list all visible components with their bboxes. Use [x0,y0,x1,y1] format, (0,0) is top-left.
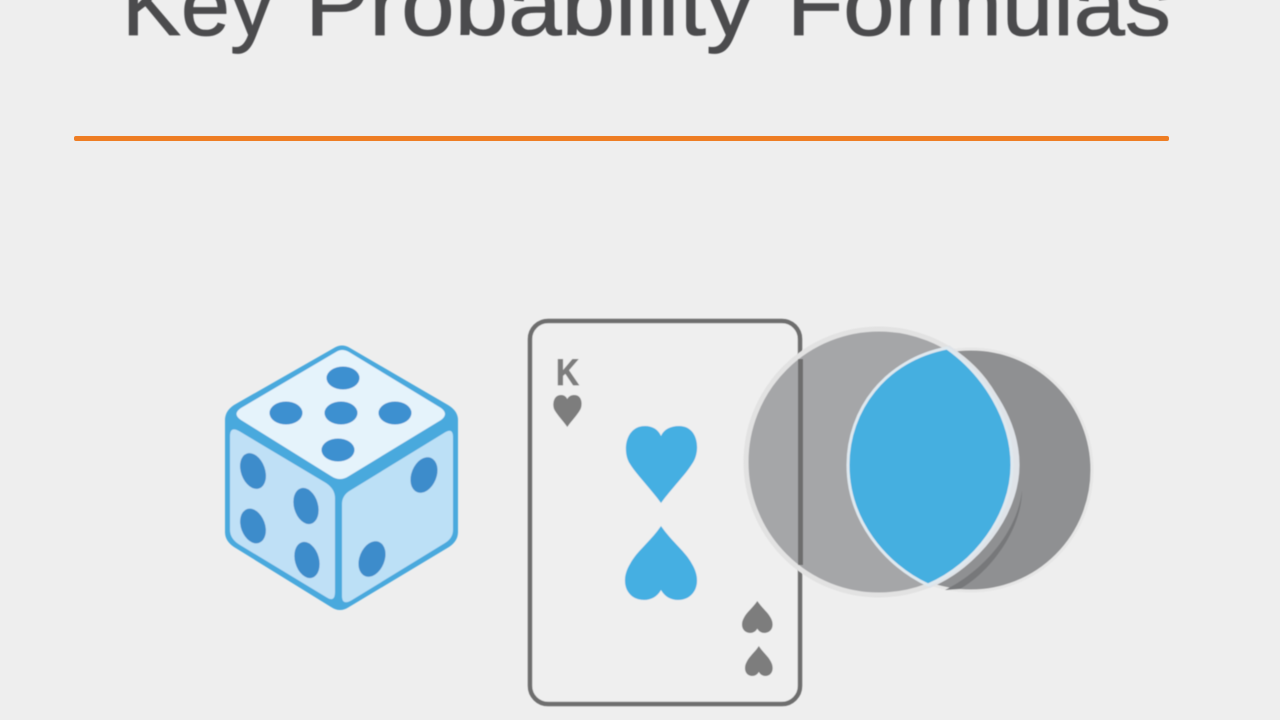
dice left face [230,429,335,599]
dice top pips [270,366,412,462]
dice right face [342,431,453,602]
small inverted heart upper [742,601,773,633]
dice top face [236,350,445,479]
lens rim [928,348,1016,585]
icon: dice [225,346,458,610]
title [122,0,1171,54]
dice right pips [353,453,443,581]
card rank K: K [556,352,579,393]
intersection lens [848,348,1012,585]
dice left pips [235,450,324,581]
right circle [850,349,1092,591]
small heart [553,395,582,427]
centre inverted heart [625,526,697,600]
venn diagram [746,329,1092,595]
left circle [746,329,1012,595]
small inverted heart lower [745,646,773,676]
centre heart [626,426,697,503]
card edge seen through left circle [798,359,803,565]
orange divider [74,136,1169,141]
icon: playing card [530,321,800,704]
lens shadow [945,490,1022,590]
